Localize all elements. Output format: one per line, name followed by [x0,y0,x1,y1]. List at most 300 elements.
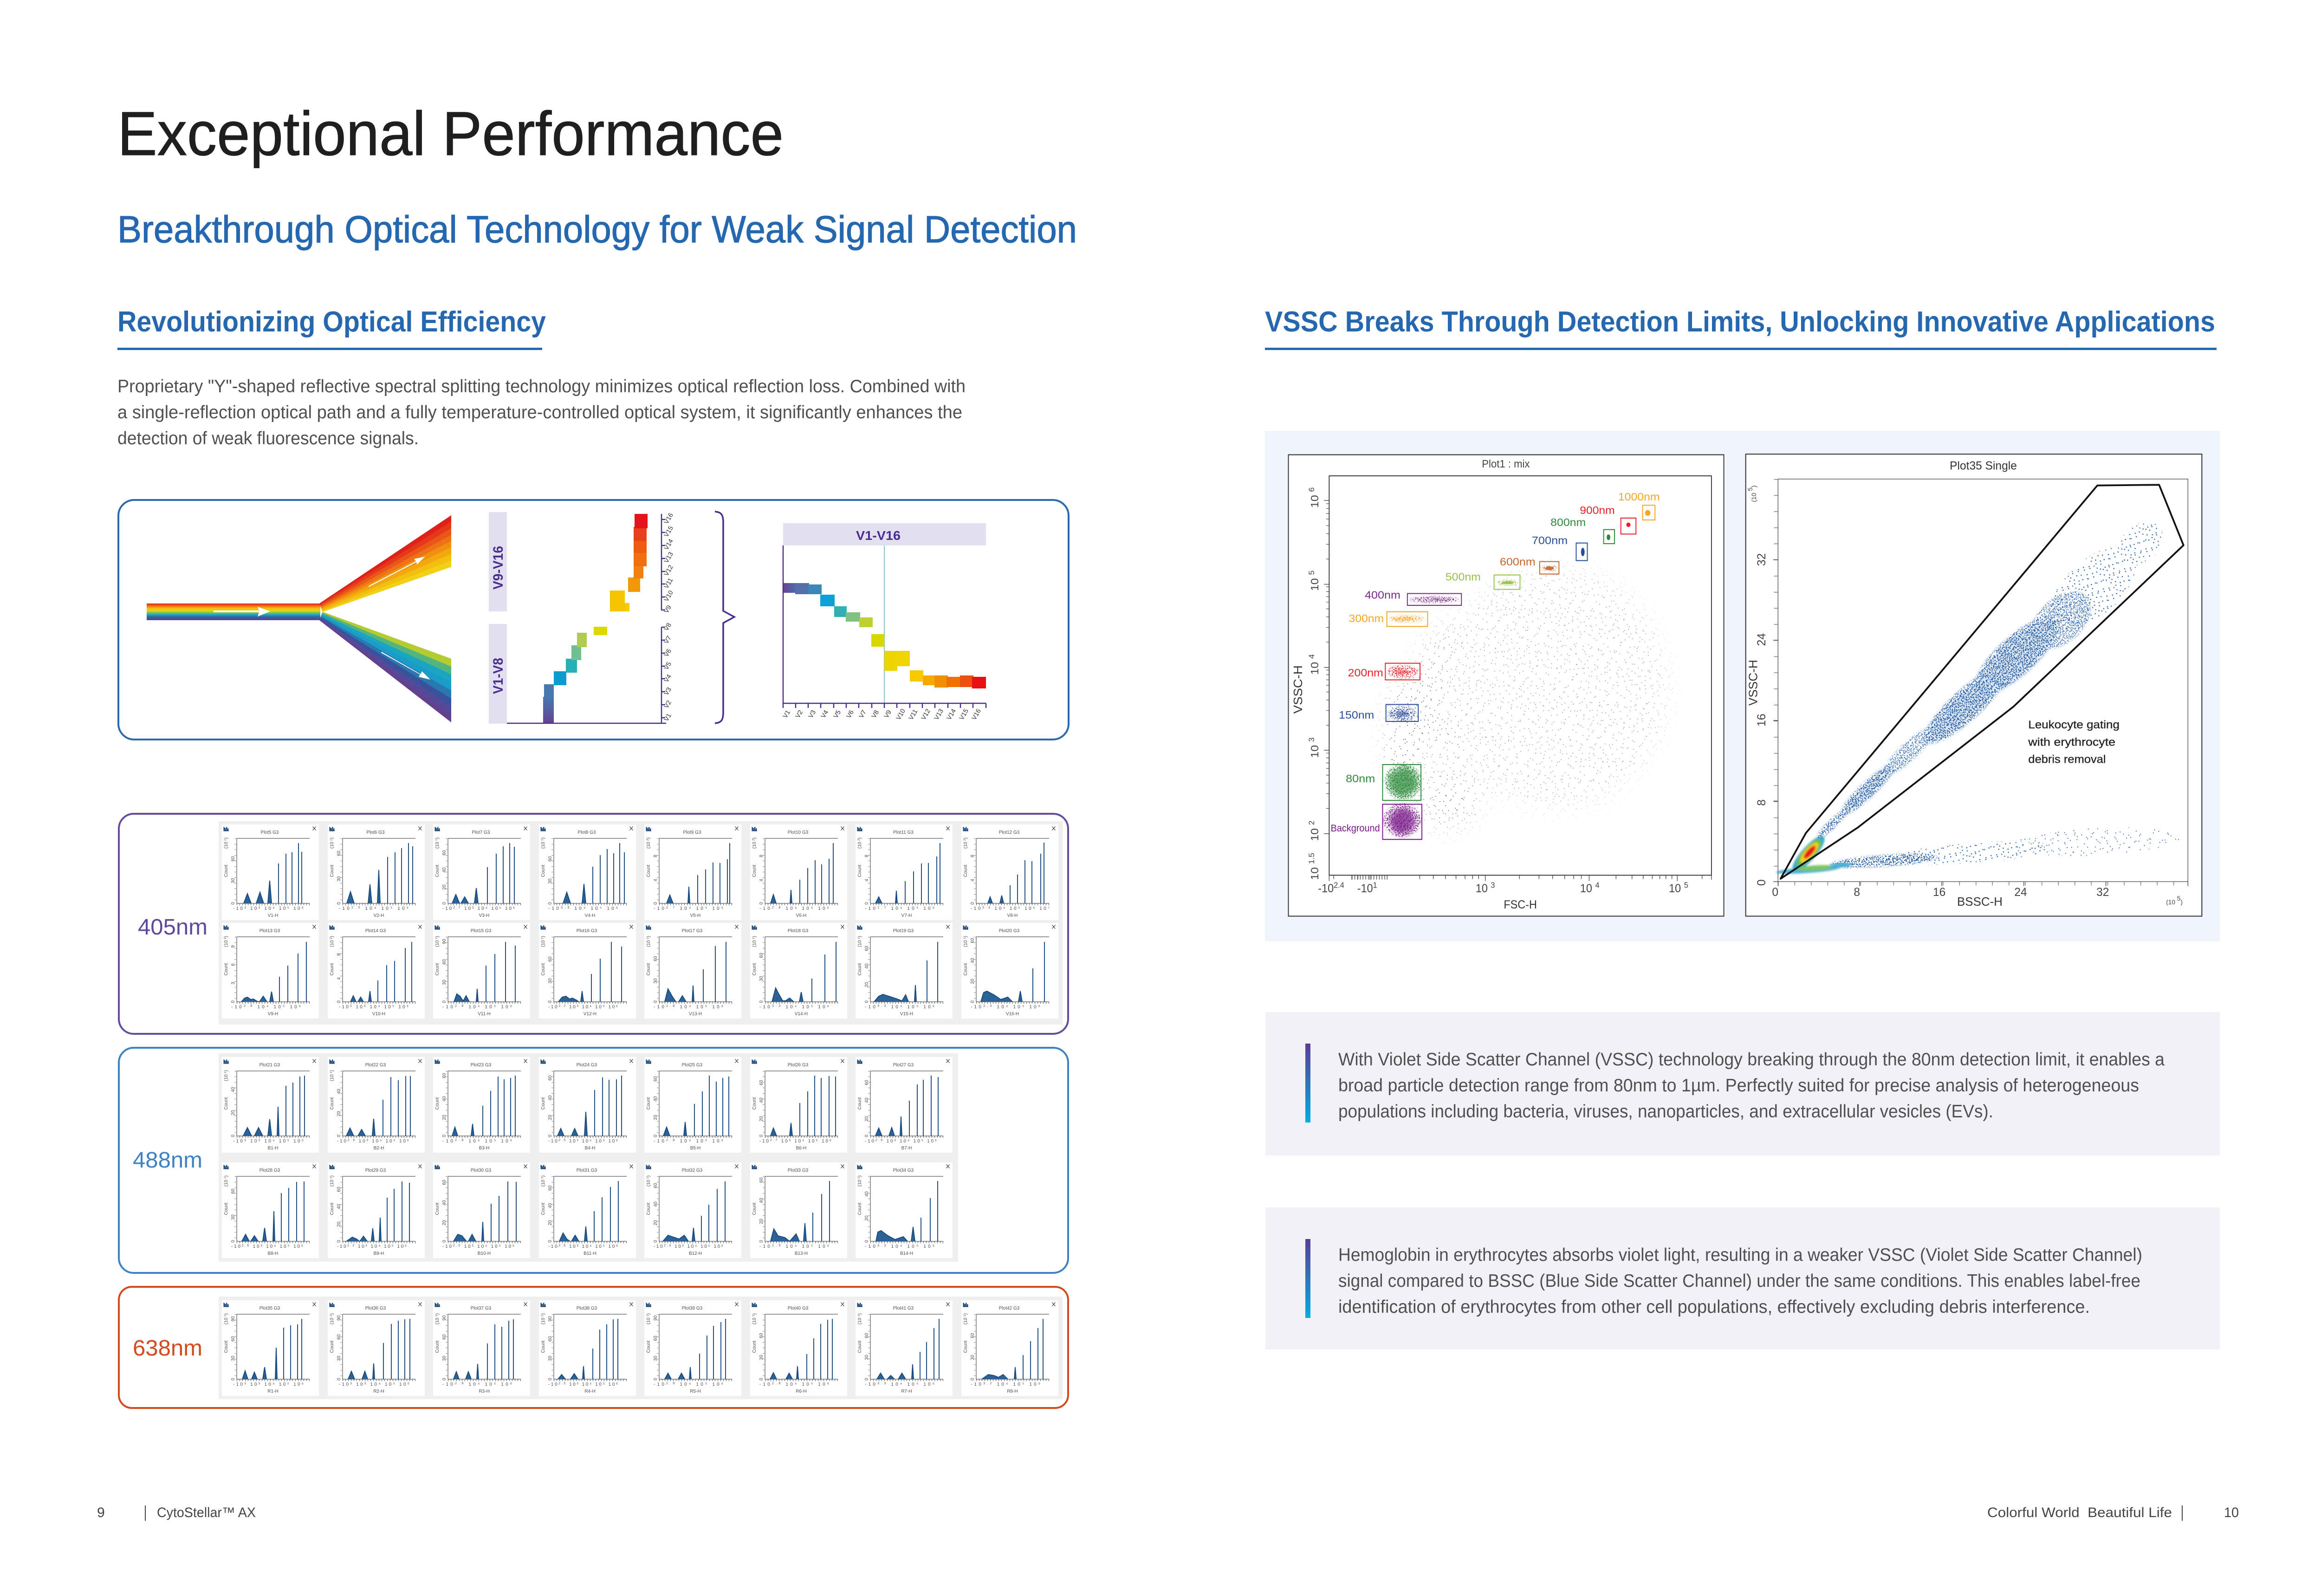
histogram: Plot16 G3: -10 2.2 10³ 10⁴ 10⁵ 10⁶ [548,1005,618,1010]
histogram: Plot35 G3: -10³ 10³ 10⁴ 10⁵ 10⁶ [233,1382,304,1387]
plot title: Plot35 Single [1950,460,2017,472]
histogram: Plot12 G3: 8 [970,855,975,857]
histogram: Plot12 G3: Plot12 G3 [999,830,1020,835]
histogram: Plot18 G3: 30 [759,976,764,981]
histogram: Plot39 G3 [644,1300,741,1396]
histogram: Plot33 G3: -10 2.9 10⁴ 10⁵ 10⁶ [759,1244,829,1249]
histogram: Plot14 G3: Count [330,963,335,975]
axes: FSC-H [1504,898,1537,911]
histogram: Plot22 G3 [328,1057,425,1153]
callout: hemoglobin VSSC vs BSSC: identification of erythrocytes from other cell populations, effectively excluding debris interference. [1338,1297,2090,1317]
chart: V1-V8 staircase: V4 [662,673,673,683]
histogram: Plot29 G3 [328,1162,425,1258]
histogram: Plot21 G3: Count [224,1097,229,1109]
histogram: Plot16 G3: V12-H [583,1012,596,1017]
histogram: Plot21 G3: 0 [231,1135,236,1137]
label: 405nm: 405nm [138,915,207,940]
histogram: Plot23 G3: 20 [442,1115,447,1120]
histogram: Plot35 G3: (10 ¹) [224,1313,229,1324]
size labels: 300nm [1349,612,1384,624]
histogram: Plot13 G3 [222,923,319,1019]
axes: BSSC-H [1957,895,2003,908]
chart: V1-V16 combined: V4 [819,708,830,720]
chart: V9-V16 staircase [610,512,674,615]
chart: V1-V16 combined: V7 [857,708,868,720]
axes: 10 3 [1307,737,1321,758]
axes: 0 [1772,886,1778,899]
histogram: Plot40 G3: 0 [759,1378,764,1381]
text block: optical efficiency description: a single-reflection optical path and a fully temperature-controlled optical system, it significantly enhances the [117,402,962,422]
histogram: Plot37 G3: 30 [442,1356,447,1361]
histogram: Plot36 G3: 0 [337,1378,342,1381]
histogram: Plot18 G3: -10 3.3 10⁴ 10⁵ 10⁶ [759,1005,829,1010]
histogram: Plot25 G3: Count [646,1097,651,1109]
size labels: 80nm [1346,772,1375,785]
axes: VSSC-H [1746,660,1760,706]
histogram: Plot9 G3 [644,824,741,920]
histogram: Plot30 G3: B10-H [478,1251,491,1256]
axes: 32 [1756,553,1768,566]
histogram: Plot39 G3: (10 ¹) [646,1313,651,1324]
chart: Plot1 mix scatter [1289,455,1724,916]
footer: left: CytoStellar™ AX [157,1505,256,1520]
histogram: Plot18 G3: (10 ¹) [752,936,757,947]
histogram: Plot26 G3 [750,1057,847,1153]
histogram: Plot31 G3 [539,1162,636,1258]
footer: right [1987,1505,2239,1521]
histogram: Plot27 G3: -10 2.6 10³ 10⁴ 10⁵ 10⁶ [865,1138,937,1144]
chart: V1-V16 combined: V15 [958,707,970,721]
histogram: Plot9 G3: Plot9 G3 [683,830,701,835]
histogram: Plot11 G3: -10 1.7 10⁴ 10⁵ 10⁶ [865,906,934,911]
panel: 405nm histograms [119,814,1068,1034]
size labels [1331,491,1660,834]
histogram: Plot26 G3: Plot26 G3 [788,1063,809,1068]
histogram: Plot40 G3: Plot40 G3 [788,1306,809,1311]
chart: V1-V16 combined: V11 [907,708,919,721]
histogram: Plot10 G3: 4 [759,879,764,882]
histogram: Plot31 G3: -10 2.6 10³ 10⁴ 10⁵ 10⁶ [548,1244,618,1249]
histogram: Plot21 G3: Plot21 G3 [259,1063,280,1068]
histogram: Plot8 G3 [539,824,636,920]
histogram: Plot29 G3: 40 [337,1204,342,1209]
histogram: Plot21 G3: 20 [231,1110,236,1116]
histogram: Plot31 G3: 0 [548,1240,553,1243]
label: V1-V8 [489,624,507,724]
histogram: Plot14 G3: 0 [337,1000,342,1003]
histogram: Plot23 G3: 0 [442,1135,447,1137]
histogram: Plot23 G3: B3-H [479,1146,489,1151]
histogram: Plot20 G3: 60 [970,938,975,943]
histogram: Plot16 G3: 60 [548,956,553,962]
callout: hemoglobin VSSC vs BSSC: Hemoglobin in erythrocytes absorbs violet light, resulting in a weaker VSSC (Violet Side Scatter Channel) [1338,1245,2142,1265]
histogram: Plot11 G3: Plot11 G3 [893,830,914,835]
histogram: Plot20 G3: Plot20 G3 [999,928,1020,934]
icon: rainbow Y beam splitter [147,515,451,722]
histogram: Plot36 G3: -10³ 10³ 10⁴ 10⁵ 10⁶ [339,1382,409,1387]
histogram: Plot36 G3: R2-H [373,1389,384,1394]
histogram: Plot18 G3: Plot18 G3 [788,928,809,934]
chart: V9-V16 staircase: V12 [662,564,674,577]
histogram: Plot6 G3: 0 [337,902,342,905]
histogram: Plot23 G3: Plot23 G3 [471,1063,492,1068]
histogram: Plot17 G3: 60 [653,956,658,961]
histogram: Plot31 G3: Plot31 G3 [577,1168,597,1173]
chart: V9-V16 staircase: V9 [662,603,673,615]
chart: V1-V16 combined [781,523,986,721]
histogram: Plot40 G3: 60 [759,1333,764,1338]
histogram: Plot5 G3 [222,824,319,920]
histogram: Plot40 G3: R6-H [796,1389,807,1394]
histogram: Plot41 G3: -10 3.3 10⁴ 10⁵ 10⁶ [865,1382,934,1387]
histogram: Plot6 G3: 60 [337,850,342,856]
axes: 10 1.5 [1307,853,1321,880]
histogram: Plot34 G3: 0 [864,1240,869,1243]
histogram: Plot25 G3: 20 [653,1115,658,1120]
histogram: Plot40 G3: (10 ¹) [752,1313,757,1324]
histogram: Plot22 G3: Count [330,1097,335,1109]
subtitle: Breakthrough Optical Technology for Weak Signal Detection [117,208,1077,251]
histogram: Plot32 G3: Plot32 G3 [682,1168,703,1173]
histogram: Plot22 G3: 20 [337,1111,342,1116]
histogram: Plot19 G3: 60 [864,946,869,951]
histogram: Plot33 G3: 0 [759,1240,764,1243]
histogram: Plot8 G3: 60 [548,856,553,862]
histogram: Plot35 G3: 60 [231,1336,236,1342]
histogram: Plot39 G3: 60 [653,1336,658,1341]
chart: V1-V16 combined: V2 [794,708,804,720]
panel: 488nm histograms [119,1048,1068,1273]
histogram: Plot8 G3: 30 [548,878,553,884]
histogram: Plot38 G3: 30 [548,1356,553,1361]
histogram: Plot9 G3: (10 ²) [646,837,651,849]
histogram: Plot11 G3 [856,824,953,920]
histogram: Plot27 G3: Count [857,1097,862,1109]
histogram: Plot5 G3: 30 [231,878,236,883]
histogram: Plot36 G3: 30 [337,1356,342,1361]
histogram: Plot26 G3: 40 [759,1097,764,1103]
histogram: Plot17 G3: 0 [653,1000,658,1003]
histogram: Plot21 G3: -10³ 10³ 10⁴ 10⁵ 10⁶ [233,1139,304,1144]
histogram: Plot8 G3: -10 3.3 10⁴ 10⁵ 10⁶ [548,906,618,911]
histogram: Plot16 G3: 30 [548,978,553,984]
histogram: Plot17 G3: 30 [653,978,658,984]
axes: 10 4 [1307,654,1321,675]
histogram: Plot27 G3: 60 [864,1080,869,1085]
annotation: leukocyte gating: Leukocyte gating [2028,719,2120,731]
histogram: Plot11 G3: V7-H [901,913,912,918]
gates [1382,505,1655,839]
histogram: Plot18 G3 [750,923,847,1019]
chart: V1-V16 combined: V8 [870,708,880,720]
histogram: Plot35 G3: 90 [231,1316,236,1322]
callout: VSSC detection range: broad particle detection range from 80nm to 1µm. Perfectly suited for precise analysis of heterogeneous [1338,1076,2139,1096]
histogram: Plot25 G3: Plot25 G3 [682,1063,703,1068]
arrow: lower branch [381,652,430,680]
histogram: Plot28 G3 [222,1162,319,1258]
histogram: Plot32 G3: 0 [653,1240,658,1243]
axes: 0 [1756,879,1768,886]
histogram: Plot36 G3: Count [330,1340,335,1353]
histogram: Plot35 G3: Count [224,1340,229,1353]
histogram: Plot20 G3: (10 ¹) [963,936,968,947]
size labels: 1000nm [1618,491,1660,503]
histogram: Plot38 G3: 0 [548,1378,553,1381]
histogram: Plot24 G3: 40 [548,1095,553,1101]
chart: V1-V8 staircase: V6 [662,647,673,658]
histogram: Plot42 G3: Count [963,1340,968,1353]
callout: VSSC detection range [1265,1012,2220,1155]
histogram: Plot16 G3: Plot16 G3 [577,928,597,934]
histogram: Plot19 G3: 20 [864,982,869,987]
histogram: Plot34 G3: 20 [864,1215,869,1221]
histogram: Plot24 G3: B4-H [585,1146,595,1151]
histogram: Plot38 G3: Plot38 G3 [577,1306,597,1311]
callout: hemoglobin VSSC vs BSSC: signal compared to BSSC (Blue Side Scatter Channel) under the same conditions. This enables label-free [1338,1271,2140,1291]
footer: right: Colorful World Beautiful Life [1987,1505,2172,1520]
histogram: Plot26 G3: Count [752,1097,757,1109]
histogram: Plot34 G3: Count [857,1202,862,1215]
diffuse grey events [1385,566,1669,831]
histogram: Plot40 G3: Count [752,1340,757,1353]
chart: V1-V16 combined: V6 [845,708,855,720]
histogram: Plot41 G3: R7-H [901,1389,912,1394]
histogram: Plot24 G3 [539,1057,636,1153]
histogram: Plot42 G3: 30 [970,1355,975,1360]
size labels: 600nm [1500,555,1536,568]
chart: V1-V16 combined: V9 [882,708,893,720]
histogram: Plot37 G3: 60 [442,1334,447,1340]
histogram: Plot22 G3: 40 [337,1089,342,1094]
histogram: Plot24 G3: Plot24 G3 [577,1063,597,1068]
annotation: leukocyte gating: with erythrocyte [2028,736,2115,748]
histogram: Plot42 G3: -10 3.2 10⁴ 10⁵ 10⁶ [971,1382,1040,1387]
icon: brace [715,512,734,723]
chart: V9-V16 staircase: V11 [662,577,674,590]
histogram: Plot17 G3: Plot17 G3 [682,928,703,934]
histogram: Plot13 G3: 9 [231,945,236,948]
histogram: Plot19 G3: (10 ¹) [857,936,862,947]
chart: V1-V8 staircase: V8 [662,621,673,632]
chart: V1-V16 combined: V5 [832,708,842,720]
histogram: Plot21 G3: (10 ¹) [224,1070,229,1081]
histogram: Plot20 G3: 0 [970,1000,975,1003]
histogram: Plot28 G3: 0 [231,1240,236,1243]
histogram: Plot21 G3: B1-H [268,1146,278,1151]
histogram: Plot32 G3: 60 [653,1183,658,1188]
histogram: Plot42 G3 [961,1300,1058,1396]
histogram: Plot8 G3: Plot8 G3 [578,830,596,835]
histogram: Plot41 G3 [856,1300,953,1396]
label: V9-V16 [489,512,507,611]
histogram: Plot14 G3: -10³ 10³ 10⁴ 10⁵ 10⁶ [339,1005,408,1010]
histogram: Plot25 G3 [644,1057,741,1153]
histogram: Plot22 G3: Plot22 G3 [365,1063,386,1068]
histogram: Plot25 G3: 0 [653,1135,658,1137]
histogram: Plot20 G3: Count [963,963,968,975]
histogram: Plot22 G3: (10 ¹) [330,1070,335,1081]
histogram: Plot12 G3: Count [963,864,968,877]
histogram: Plot7 G3: (10 ¹) [435,837,440,849]
histogram: Plot10 G3: (10 ²) [752,837,757,849]
histogram: Plot7 G3: 60 [442,850,447,856]
axes: 10 6 [1307,487,1321,508]
size labels: 800nm [1550,516,1586,528]
axes: 10 4 [1580,881,1600,895]
histogram: Plot29 G3: (10 ¹) [330,1175,335,1187]
histogram: Plot37 G3: R3-H [479,1389,490,1394]
histogram: Plot7 G3: -10 2.7 10³ 10⁴ 10⁵ 10⁶ [442,906,515,911]
histogram: Plot20 G3: V16-H [1006,1012,1019,1017]
histogram: Plot18 G3: 0 [759,1000,764,1003]
histogram: Plot10 G3: 8 [759,855,764,857]
histogram: Plot5 G3: V1-H [268,913,278,918]
chart: V1-V8 staircase: V7 [662,634,673,645]
histogram: Plot18 G3: V14-H [795,1012,808,1017]
histogram: Plot26 G3: B6-H [796,1146,806,1151]
histogram: Plot24 G3: Count [541,1097,546,1109]
histogram: Plot31 G3: 20 [548,1220,553,1226]
histogram: Plot38 G3 [539,1300,636,1396]
axes: 32 [2096,886,2109,899]
histogram: Plot34 G3: B14-H [900,1251,913,1256]
size labels: 500nm [1446,571,1481,583]
axes: 8 [1756,799,1768,806]
histogram: Plot19 G3: Count [857,963,862,975]
histogram: Plot27 G3: Plot27 G3 [893,1063,914,1068]
histogram: Plot17 G3: -10 2.8 10⁴ 10⁵ 10⁶ [654,1005,723,1010]
histogram: Plot19 G3: Plot19 G3 [893,928,914,934]
histogram: Plot37 G3: (10 ¹) [435,1313,440,1324]
histogram: Plot24 G3: 0 [548,1135,553,1137]
histogram: Plot24 G3: -10 2.5 10³ 10⁴ 10⁵ 10⁶ [548,1138,618,1144]
histogram: Plot37 G3 [433,1300,530,1396]
histogram: Plot33 G3: Count [752,1202,757,1215]
histogram: Plot17 G3 [644,923,741,1019]
histogram: Plot11 G3: Count [857,864,862,877]
histogram: Plot9 G3: 4 [653,879,658,882]
histogram: Plot8 G3: 0 [548,902,553,905]
histogram: Plot42 G3: 0 [970,1378,975,1381]
histogram: Plot9 G3: V5-H [690,913,700,918]
histogram: Plot38 G3: 90 [548,1316,553,1322]
histogram: Plot28 G3: Count [224,1202,229,1215]
label: V9-V16: V9-V16 [491,546,506,590]
heading: Revolutionizing Optical Efficiency: Revolutionizing Optical Efficiency [117,306,546,338]
histogram: Plot20 G3 [961,923,1058,1019]
histogram: Plot21 G3: 40 [231,1087,236,1092]
histogram: Plot5 G3: Count [224,864,229,877]
axes: 5 [2177,895,2181,902]
histogram: Plot33 G3: 20 [759,1219,764,1224]
histogram: Plot41 G3: Count [857,1340,862,1353]
histogram: Plot13 G3: V9-H [268,1012,278,1017]
histogram: Plot30 G3: Plot30 G3 [471,1168,492,1173]
chart: V1-V16 combined: V12 [920,707,932,721]
axes: 16 [1933,886,1945,899]
histogram: Plot39 G3: R5-H [690,1389,701,1394]
histogram: Plot34 G3: Plot34 G3 [893,1168,914,1173]
histogram: Plot14 G3: 8 [337,953,342,956]
histogram: Plot6 G3: Count [330,864,335,877]
histogram: Plot10 G3: 0 [759,902,764,905]
histogram: Plot7 G3: Count [435,864,440,877]
histogram: Plot9 G3: 0 [653,902,658,905]
histogram: Plot17 G3: V13-H [689,1012,702,1017]
histogram: Plot27 G3: B7-H [901,1146,912,1151]
histogram: Plot8 G3: (10 ¹) [541,837,546,849]
histogram: Plot16 G3 [539,923,636,1019]
chart: V1-V8 staircase [507,621,673,724]
histogram: Plot30 G3: 40 [442,1200,447,1206]
histogram: Plot24 G3: 60 [548,1075,553,1081]
histogram: Plot29 G3: 60 [337,1187,342,1192]
histogram: Plot28 G3: (10 ¹) [224,1175,229,1187]
histogram: Plot41 G3: 60 [864,1333,869,1338]
histogram: Plot26 G3: 0 [759,1135,764,1137]
chart: V9-V16 staircase: V14 [662,538,674,551]
histogram: Plot34 G3: 40 [864,1191,869,1197]
histogram: Plot6 G3 [328,824,425,920]
histogram: Plot22 G3: B2-H [374,1146,384,1151]
histogram: Plot22 G3: 0 [337,1135,342,1137]
histogram: Plot40 G3 [750,1300,847,1396]
histogram: Plot11 G3: (10 ²) [857,837,862,849]
histogram: Plot19 G3: -10 3.3 10⁴ 10⁵ 10⁶ [865,1005,934,1010]
histogram: Plot42 G3: (10 ¹) [963,1313,968,1324]
histogram: Plot28 G3: B8-H [268,1251,278,1256]
size labels: 400nm [1365,589,1400,601]
axes: -101 [1357,881,1377,895]
histogram: Plot39 G3: 30 [653,1356,658,1361]
histogram: Plot13 G3: Count [224,963,229,975]
histogram: Plot12 G3: 4 [970,879,975,882]
histogram: Plot35 G3 [222,1300,319,1396]
histogram: Plot24 G3: 20 [548,1115,553,1120]
histogram: Plot6 G3: 30 [337,876,342,882]
histogram: Plot25 G3: B5-H [690,1146,700,1151]
histogram: Plot14 G3: 4 [337,977,342,980]
histogram: Plot32 G3: B12-H [689,1251,702,1256]
chart: V9-V16 staircase: V10 [662,589,674,603]
histogram: Plot32 G3: (10 ¹) [646,1175,651,1187]
histogram: Plot29 G3: 0 [337,1240,342,1243]
histogram: Plot13 G3: Plot13 G3 [259,928,280,934]
histogram: Plot32 G3: Count [646,1202,651,1215]
histogram: Plot15 G3: -10 2.8 10⁴ 10⁵ 10⁶ [442,1005,512,1010]
histogram: Plot23 G3: 40 [442,1096,447,1102]
histogram: Plot5 G3: -10³ 10³ 10⁴ 10⁵ 10⁶ [233,906,304,911]
arrow: upper branch [369,557,425,587]
histogram: Plot30 G3: Count [435,1202,440,1215]
chart: V1-V16 combined: V13 [933,707,945,721]
histogram: Plot35 G3: 0 [231,1378,236,1381]
histogram: Plot31 G3: Count [541,1202,546,1215]
histogram: Plot5 G3: 0 [231,902,236,905]
axes [1291,476,1712,911]
histogram: Plot28 G3: 30 [231,1214,236,1220]
histogram: Plot39 G3: -10 2.9 10⁴ 10⁵ 10⁶ [654,1382,723,1387]
histogram: Plot23 G3: Count [435,1097,440,1109]
histogram: Plot30 G3: -10 2.5 10³ 10⁴ 10⁵ 10⁶ [442,1244,514,1249]
footer: left: 9 [97,1505,105,1520]
histogram: Plot32 G3: 20 [653,1220,658,1226]
label: 488nm: 488nm [133,1148,202,1173]
histogram: Plot29 G3: Plot29 G3 [365,1168,386,1173]
histogram: Plot10 G3: Plot10 G3 [788,830,809,835]
histogram: Plot6 G3: Plot6 G3 [367,830,385,835]
histogram: Plot10 G3 [750,824,847,920]
